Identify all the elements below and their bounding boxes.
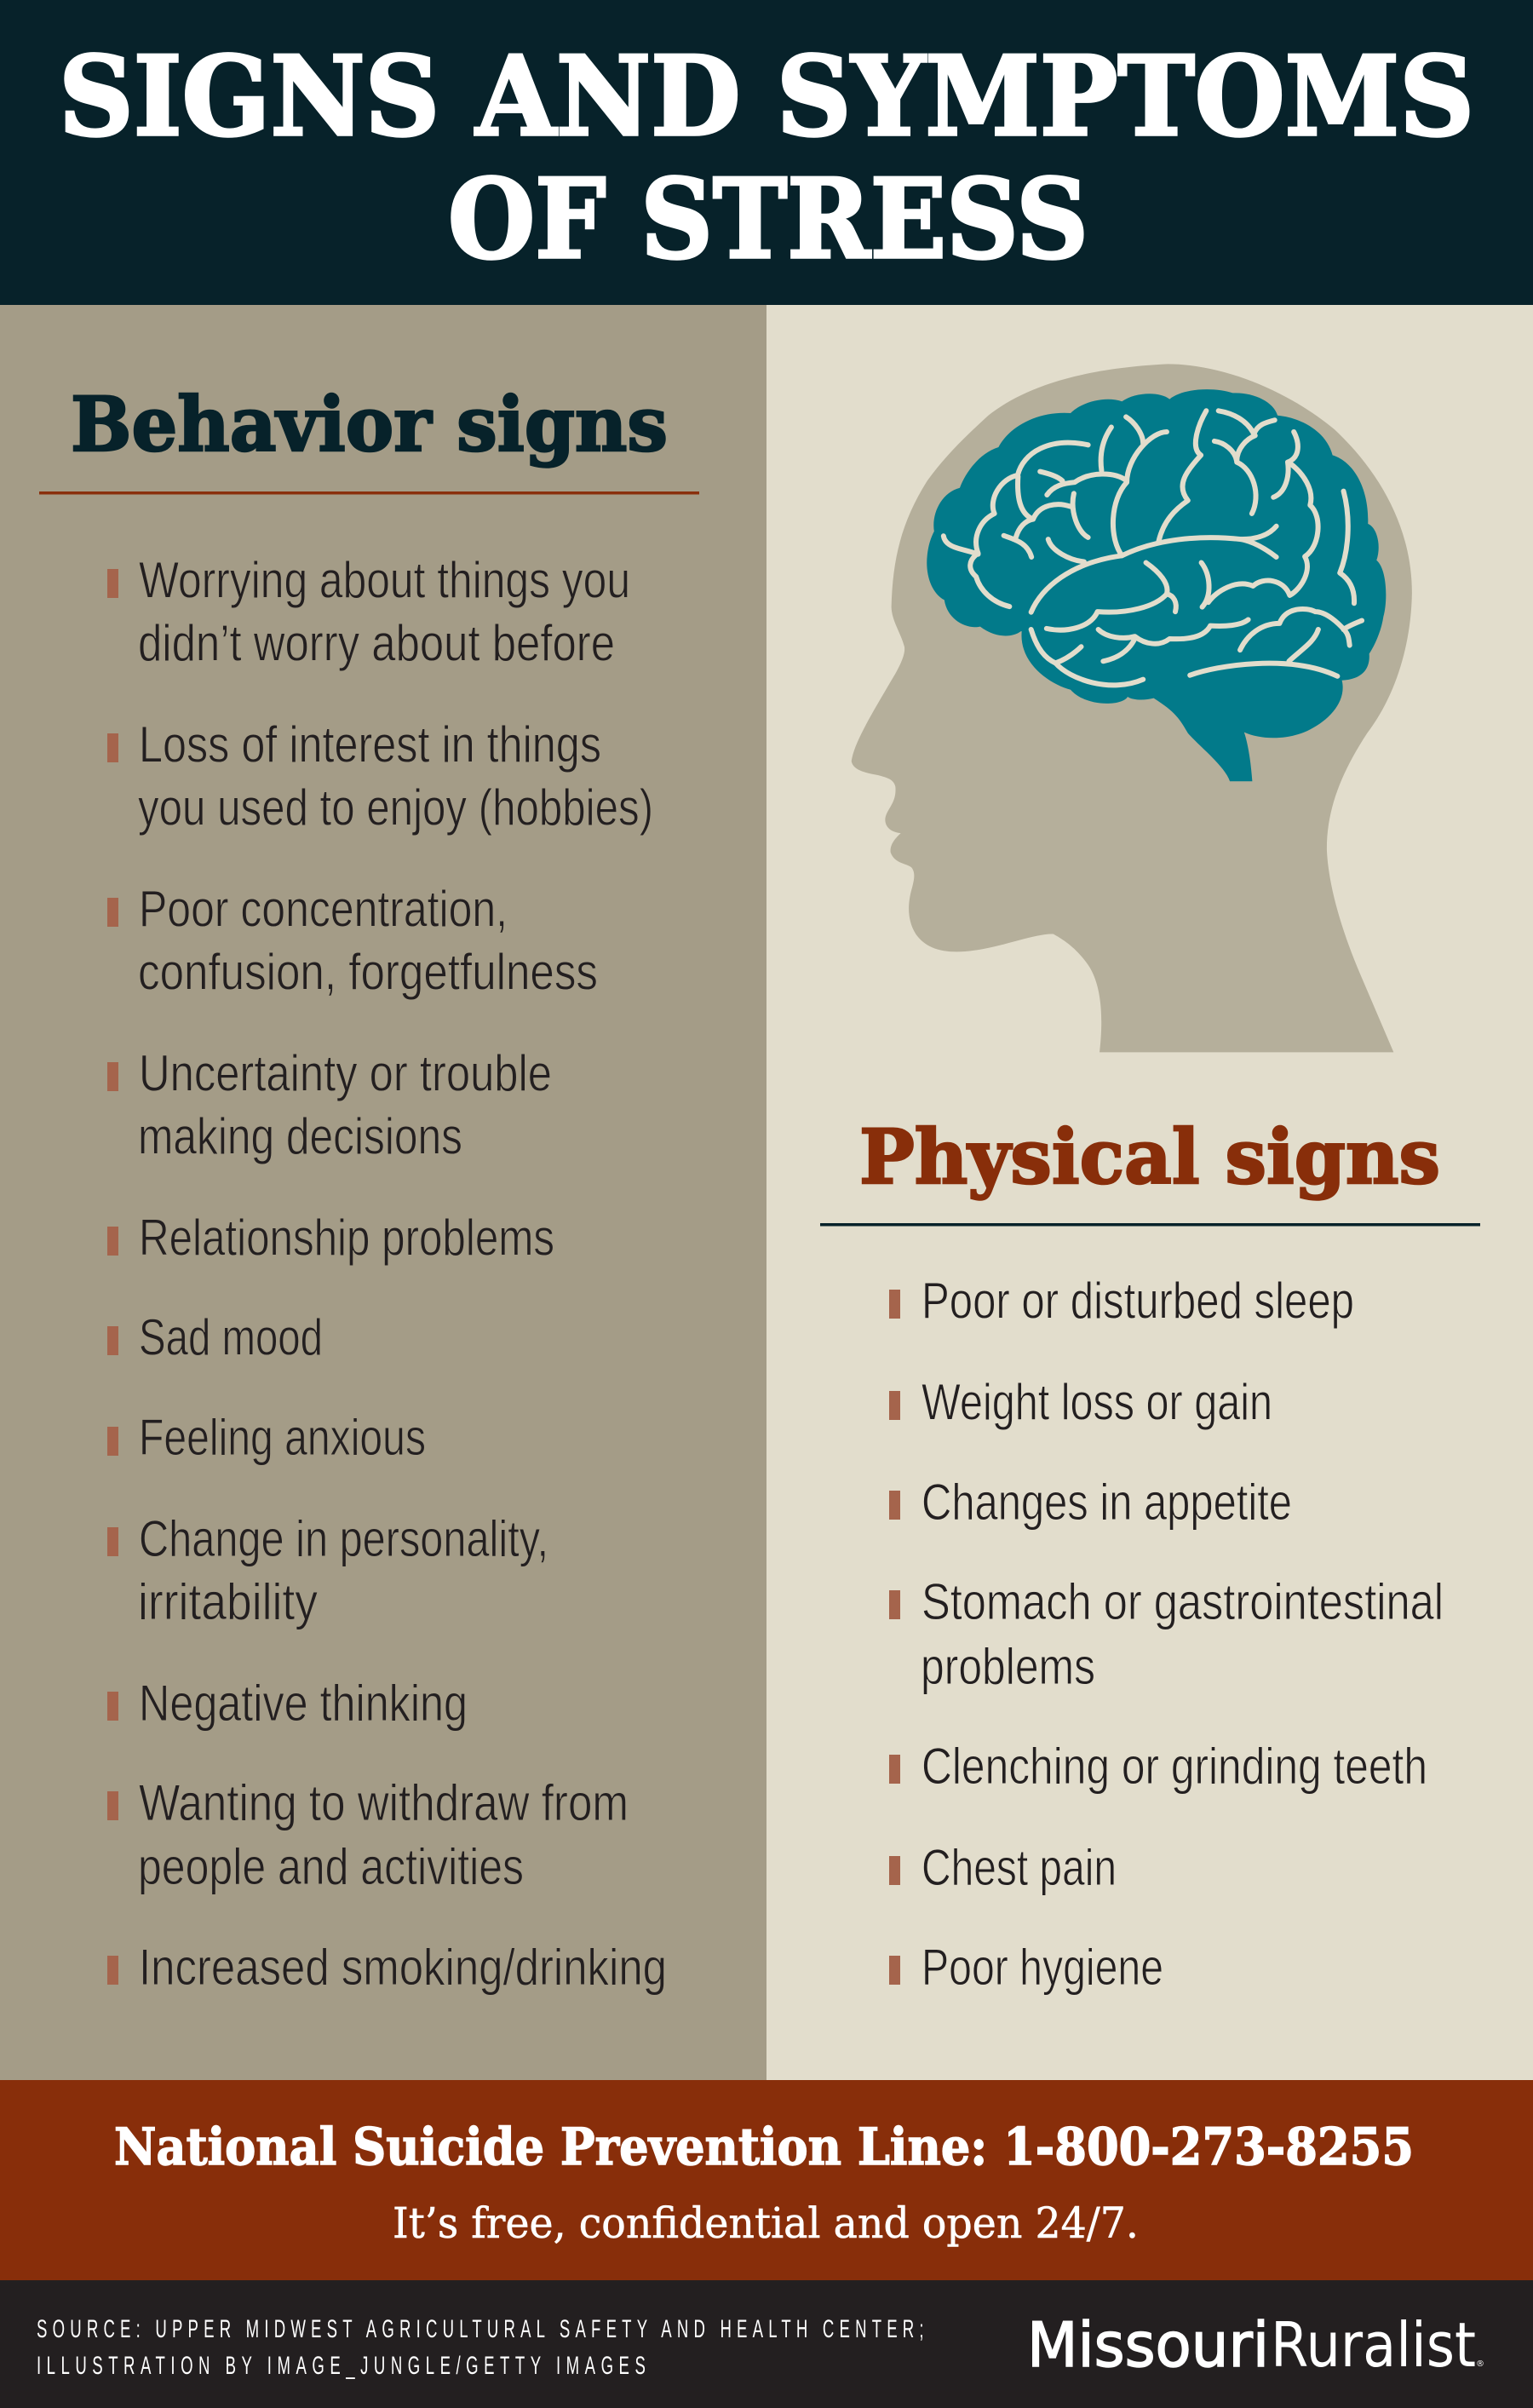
logo: Missouri Ruralist bbox=[1027, 2309, 1484, 2381]
footer bar bbox=[0, 2280, 1533, 2408]
list: behavior signs: making decisions bbox=[138, 1107, 462, 1165]
brain bbox=[927, 389, 1386, 781]
list: behavior signs: Sad mood bbox=[139, 1308, 323, 1366]
list: physical signs: Weight loss or gain bbox=[922, 1373, 1272, 1431]
brain folds bbox=[944, 411, 1362, 685]
list: behavior signs: Increased smoking/drinking bbox=[139, 1939, 667, 1996]
list: behavior signs: Poor concentration, bbox=[139, 881, 508, 937]
list: physical signs: Chest pain bbox=[922, 1839, 1117, 1896]
list: physical signs: Changes in appetite bbox=[922, 1474, 1292, 1531]
list: behavior signs bbox=[107, 552, 667, 1996]
title banner: SIGNS AND SYMPTOMS bbox=[59, 33, 1474, 161]
callout: suicide prevention line bbox=[0, 2080, 1533, 2280]
title banner bbox=[0, 0, 1533, 305]
list: behavior signs: didn’t worry about before bbox=[138, 615, 615, 671]
list: behavior signs: irritability bbox=[138, 1573, 318, 1630]
logo: Missouri Ruralist: Missouri bbox=[1027, 2309, 1269, 2381]
list: behavior signs: Feeling anxious bbox=[139, 1409, 426, 1466]
panel: background right bbox=[766, 305, 1533, 2080]
list: behavior signs: Change in personality, bbox=[139, 1510, 548, 1567]
callout: suicide prevention line: It’s free, confidential and open 24/7. bbox=[393, 2198, 1139, 2248]
list: physical signs bbox=[889, 1273, 1444, 1996]
logo: Missouri Ruralist: ® bbox=[1476, 2359, 1484, 2369]
heading: physical signs: Physical signs bbox=[859, 1112, 1440, 1201]
source credit: ILLUSTRATION BY IMAGE_JUNGLE/GETTY IMAGES bbox=[37, 2352, 646, 2380]
source credit: SOURCE: UPPER MIDWEST AGRICULTURAL SAFETY AND HEALTH CENTER; bbox=[37, 2315, 924, 2343]
illustration: head silhouette with brain bbox=[852, 364, 1412, 1052]
head silhouette bbox=[852, 364, 1412, 1052]
list: behavior signs: Uncertainty or trouble bbox=[139, 1044, 552, 1102]
list: behavior signs: people and activities bbox=[138, 1838, 524, 1895]
list: physical signs: Poor hygiene bbox=[922, 1939, 1163, 1996]
list: behavior signs: Wanting to withdraw from bbox=[139, 1774, 629, 1831]
callout: suicide prevention line: National Suicide Prevention Line: 1-800-273-8255 bbox=[114, 2118, 1414, 2177]
title banner: OF STRESS bbox=[448, 156, 1088, 284]
source credit bbox=[37, 2315, 924, 2380]
list: behavior signs: Loss of interest in things bbox=[139, 716, 601, 773]
list: physical signs: problems bbox=[921, 1638, 1095, 1695]
list: physical signs: Clenching or grinding teeth bbox=[922, 1738, 1427, 1795]
list: behavior signs: Negative thinking bbox=[139, 1675, 468, 1732]
list: physical signs: Poor or disturbed sleep bbox=[922, 1273, 1354, 1329]
list: behavior signs: Relationship problems bbox=[139, 1210, 554, 1266]
list: behavior signs: you used to enjoy (hobbies) bbox=[138, 779, 653, 836]
list: physical signs: Stomach or gastrointestinal bbox=[922, 1573, 1444, 1630]
heading: behavior signs: Behavior signs bbox=[71, 380, 668, 468]
logo: Missouri Ruralist: Ruralist bbox=[1271, 2309, 1476, 2381]
panel: behavior background bbox=[0, 305, 766, 2080]
list: behavior signs: confusion, forgetfulness bbox=[138, 944, 598, 1000]
list: behavior signs: Worrying about things you bbox=[139, 552, 630, 608]
